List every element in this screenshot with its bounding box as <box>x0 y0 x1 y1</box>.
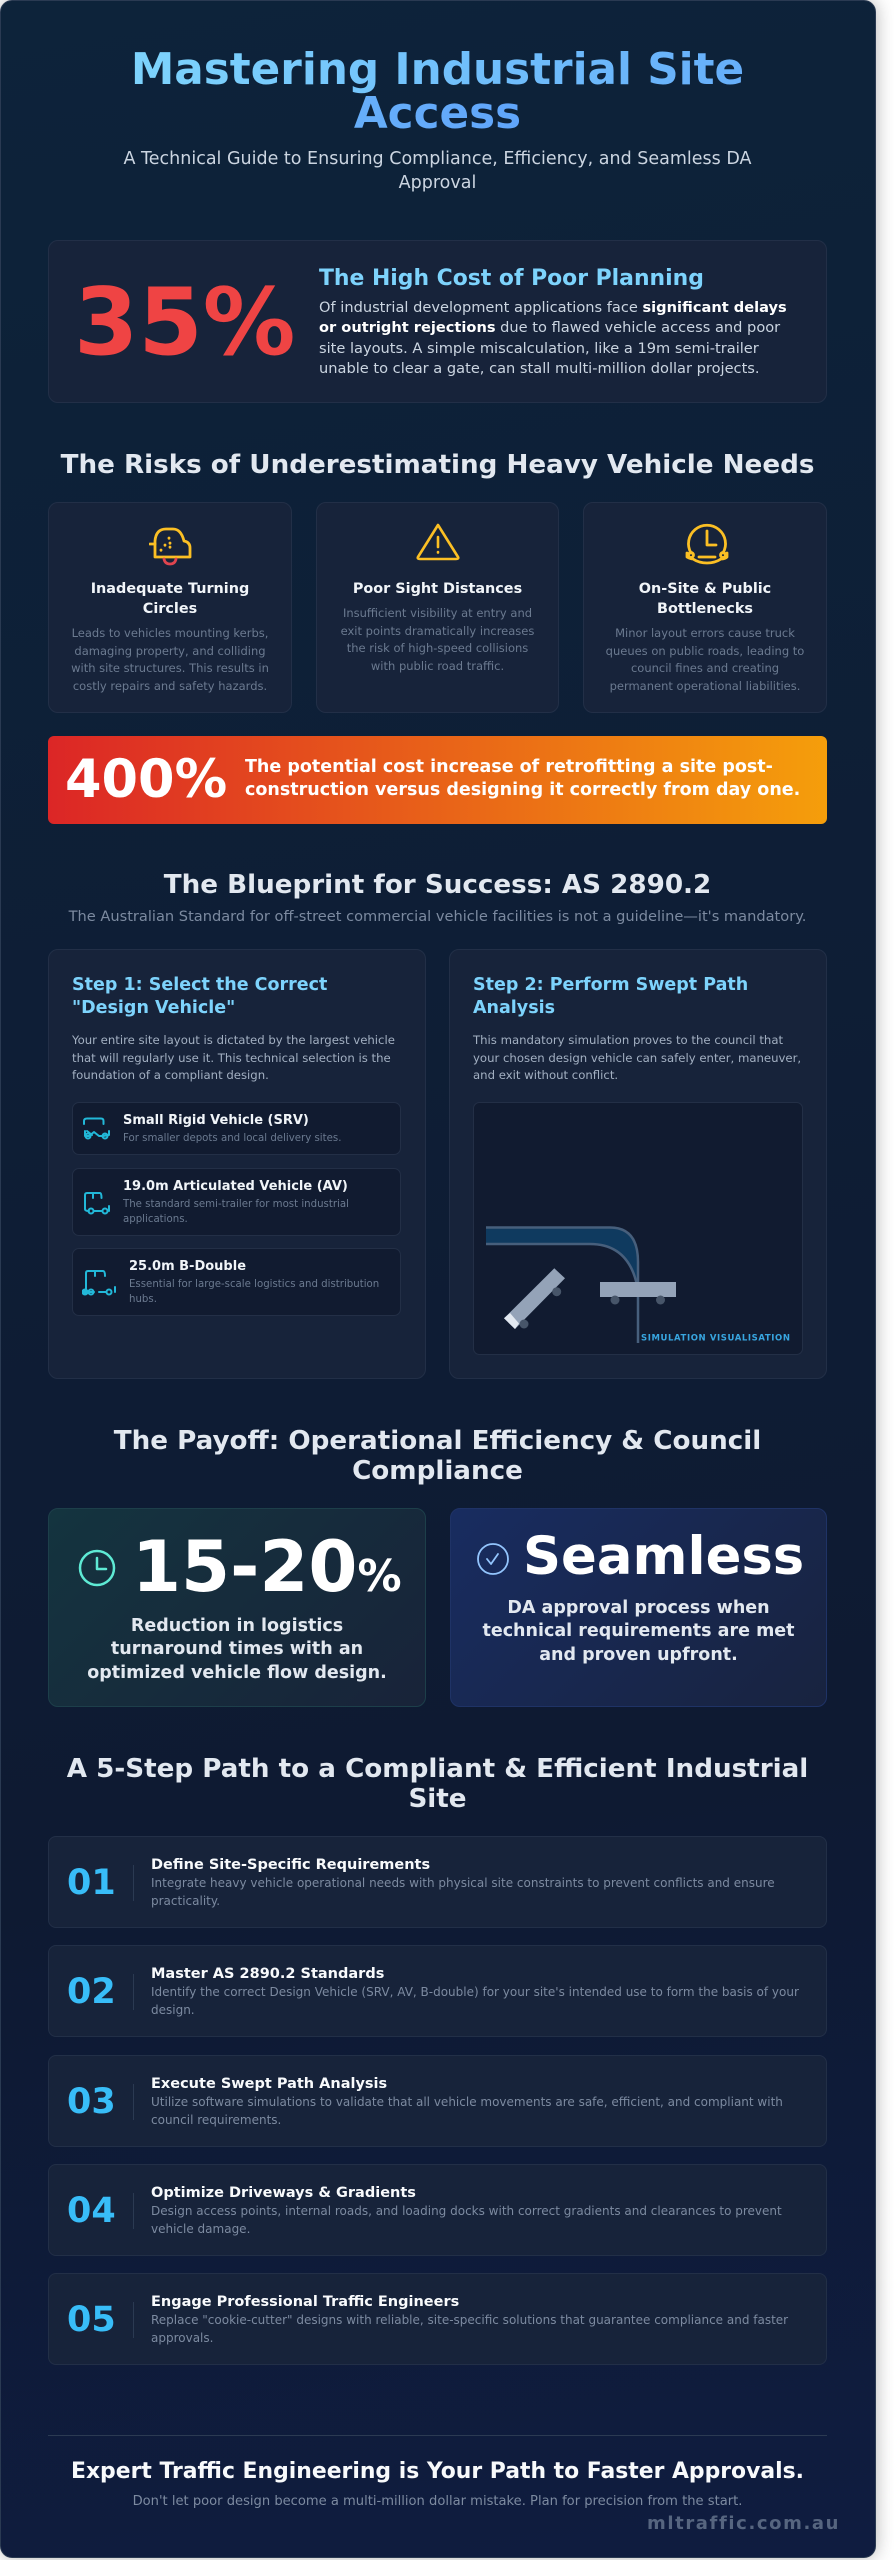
step title: Master AS 2890.2 Standards <box>151 1966 384 1982</box>
subtitle: A Technical Guide to Ensuring Compliance, Efficiency, and Seamless DA <box>124 149 751 169</box>
simulation visualisation <box>473 1102 803 1355</box>
step title: Execute Swept Path Analysis <box>151 2076 387 2092</box>
vehicle description: The standard semi-trailer for most industrial <box>123 1199 349 1210</box>
footer subtext: Don't let poor design become a multi-million dollar mistake. Plan for precision from the start. <box>133 2494 742 2509</box>
vehicle description <box>123 1199 349 1225</box>
simulation label: SIMULATION VISUALISATION <box>641 1334 790 1344</box>
headline text: and proven upfront. <box>539 1645 738 1665</box>
straight truck <box>600 1282 676 1304</box>
headline text <box>482 1598 795 1665</box>
card title: Poor Sight Distances <box>353 581 522 597</box>
heading: payoff: Compliance <box>352 1456 523 1486</box>
card text: damaging property, and colliding <box>74 644 266 658</box>
card text: queues on public roads, leading to <box>606 644 804 658</box>
step text: Integrate heavy vehicle operational needs with physical site constraints to prevent conflicts and ensure <box>151 1876 775 1890</box>
icon: check circle <box>477 1543 509 1575</box>
step 04 <box>48 2164 827 2256</box>
vehicle: AV <box>72 1168 401 1236</box>
card text: Insufficient visibility at entry and <box>343 606 532 620</box>
panel body text: site layouts. A simple miscalculation, like a 19m semi-trailer <box>319 340 759 357</box>
heading: 5-step path <box>66 1754 808 1814</box>
subtitle: Approval <box>399 173 476 193</box>
step text: approvals. <box>151 2330 213 2344</box>
step 1 text: that will regularly use it. This technical selection is the <box>72 1050 391 1064</box>
stat text: optimized vehicle flow design. <box>87 1663 387 1683</box>
step 02 <box>48 1945 827 2037</box>
panel body text <box>319 299 787 377</box>
step 2 heading: Step 2: Perform Swept Path <box>473 975 748 995</box>
card text: with site structures. This results in <box>71 661 269 675</box>
step text <box>151 2095 783 2126</box>
heading: 5-step path: Site <box>408 1784 467 1814</box>
vehicle: B-double <box>72 1248 401 1316</box>
icon: clock with truck <box>686 524 728 564</box>
step text <box>151 2204 782 2236</box>
card text <box>606 626 804 692</box>
footer headline: Expert Traffic Engineering is Your Path to Faster Approvals. <box>71 2459 804 2484</box>
card text <box>341 606 534 672</box>
step 05 <box>48 2273 827 2365</box>
panel heading: The High Cost of Poor Planning <box>319 266 704 291</box>
panel: poor sight distances <box>316 502 559 713</box>
icon: small rigid truck <box>83 1118 110 1140</box>
step text: vehicle damage. <box>151 2222 250 2236</box>
number: 03 <box>67 2082 116 2122</box>
panel body text: unable to clear a gate, can stall multi-million dollar projects. <box>319 360 760 377</box>
step text <box>151 2313 788 2344</box>
vehicle description: hubs. <box>129 1294 157 1305</box>
panel: 15-20% <box>48 1508 426 1707</box>
card text: costly repairs and safety hazards. <box>73 678 267 692</box>
watermark: mltraffic.com.au <box>647 2513 840 2534</box>
panel: high cost of poor planning <box>48 240 827 403</box>
headline text: technical requirements are met <box>482 1621 795 1641</box>
callout text: The potential cost increase of retrofitting a site post- <box>245 757 773 777</box>
blueprint subtitle: The Australian Standard for off-street commercial vehicle facilities is not a guideline—it's mandatory. <box>69 908 806 925</box>
step 1 text: Your entire site layout is dictated by the largest vehicle <box>72 1033 395 1047</box>
heading: payoff: The Payoff: Operational Efficiency & Council <box>114 1426 761 1456</box>
card text: council fines and creating <box>631 661 779 675</box>
panel: step 1 <box>48 949 426 1379</box>
step text: Utilize software simulations to validate that all vehicle movements are safe, efficient, and compliant with <box>151 2095 783 2109</box>
card text: with public road traffic. <box>371 658 504 672</box>
step 01 <box>48 1836 827 1928</box>
step text <box>151 1876 775 1908</box>
step 2 heading: Analysis <box>473 998 555 1018</box>
step text: Design access points, internal roads, and loading docks with correct gradients and clearances to prevent <box>151 2204 782 2218</box>
number: 02 <box>67 1972 116 2012</box>
card text: exit points dramatically increases <box>341 624 534 638</box>
subtitle <box>124 149 752 193</box>
vehicle description: Essential for large-scale logistics and distribution <box>129 1279 379 1290</box>
heading: payoff <box>114 1426 761 1486</box>
card title: Bottlenecks <box>657 601 753 617</box>
panel: step 2 <box>449 949 827 1379</box>
step text: Replace "cookie-cutter" designs with reliable, site-specific solutions that guarantee compliance and faster <box>151 2313 788 2327</box>
step 1 text: foundation of a compliant design. <box>72 1068 269 1082</box>
card text: Leads to vehicles mounting kerbs, <box>72 626 268 640</box>
step 1 heading <box>72 975 327 1018</box>
step 2 text: This mandatory simulation proves to the council that <box>473 1033 783 1047</box>
step 1 text <box>72 1033 395 1082</box>
icon: truck turning <box>149 528 192 566</box>
vehicle description: For smaller depots and local delivery sites. <box>123 1133 341 1144</box>
stat text: Reduction in logistics <box>131 1616 343 1636</box>
step text <box>151 1985 799 2016</box>
callout text: construction versus designing it correctly from day one. <box>245 780 800 800</box>
vehicle: SRV <box>72 1102 401 1155</box>
step 2 text: and exit without conflict. <box>473 1068 618 1082</box>
card text <box>71 626 269 692</box>
angled truck <box>504 1268 565 1329</box>
step 1 heading: Step 1: Select the Correct <box>72 975 327 995</box>
big stat 35%: 35% <box>74 268 295 376</box>
card title: On-Site & Public <box>639 581 771 597</box>
card title: Inadequate Turning <box>91 581 249 597</box>
stat: 400% <box>65 749 227 810</box>
step text: council requirements. <box>151 2112 281 2126</box>
stat text <box>87 1616 387 1683</box>
title: Mastering Industrial Site <box>131 44 744 95</box>
step title: Engage Professional Traffic Engineers <box>151 2294 459 2310</box>
headline text: DA approval process when <box>507 1598 770 1618</box>
step title: Optimize Driveways & Gradients <box>151 2185 416 2201</box>
step 2 text: your chosen design vehicle can safely enter, maneuver, <box>473 1050 801 1064</box>
stat text: turnaround times with an <box>111 1639 363 1659</box>
step text: practicality. <box>151 1894 220 1908</box>
number: 05 <box>67 2300 116 2340</box>
step text: design. <box>151 2002 195 2016</box>
panel body text: Of industrial development applications face significant delays <box>319 299 787 316</box>
panel: seamless <box>450 1508 827 1707</box>
icon: clock <box>78 1550 116 1586</box>
vehicle name: 25.0m B-Double <box>129 1259 246 1274</box>
icon: warning triangle <box>416 524 460 560</box>
heading: risks: The Risks of Underestimating Heavy Vehicle Needs <box>61 450 814 480</box>
swept path <box>486 1228 638 1343</box>
step 03 <box>48 2055 827 2147</box>
card title <box>91 581 249 617</box>
heading: blueprint: The Blueprint for Success: AS 2890.2 <box>164 870 711 900</box>
card text: the risk of high-speed collisions <box>347 641 528 655</box>
callout: 400% <box>48 736 827 824</box>
stat: 15-20% <box>132 1526 402 1608</box>
number: 04 <box>67 2191 116 2231</box>
card title: Circles <box>143 601 197 617</box>
card text: permanent operational liabilities. <box>610 678 800 692</box>
number: 01 <box>67 1863 116 1903</box>
title: Access <box>354 88 521 139</box>
card text: Minor layout errors cause truck <box>615 626 795 640</box>
vehicle description: applications. <box>123 1214 188 1225</box>
icon: b-double truck <box>82 1270 116 1296</box>
panel body text: or outright rejections due to flawed vehicle access and poor <box>319 319 780 336</box>
icon: articulated truck <box>84 1192 110 1214</box>
step 2 text <box>472 1033 801 1082</box>
vehicle name: 19.0m Articulated Vehicle (AV) <box>123 1179 348 1194</box>
panel: inadequate turning circles <box>48 502 292 713</box>
vehicle description <box>129 1279 379 1305</box>
title <box>131 44 744 139</box>
panel: bottlenecks <box>583 502 827 713</box>
vehicle name: Small Rigid Vehicle (SRV) <box>123 1113 309 1128</box>
headline: Seamless <box>523 1526 804 1587</box>
heading: 5-step path: A 5-Step Path to a Compliant & Efficient Industrial <box>67 1754 808 1784</box>
card title <box>639 581 771 617</box>
step 2 heading <box>473 975 748 1018</box>
step text: Identify the correct Design Vehicle (SRV, AV, B-double) for your site's intended use to form the basis of your <box>151 1985 799 1999</box>
callout text <box>245 757 800 800</box>
step title: Define Site-Specific Requirements <box>151 1857 430 1873</box>
step 1 heading: "Design Vehicle" <box>72 998 235 1018</box>
